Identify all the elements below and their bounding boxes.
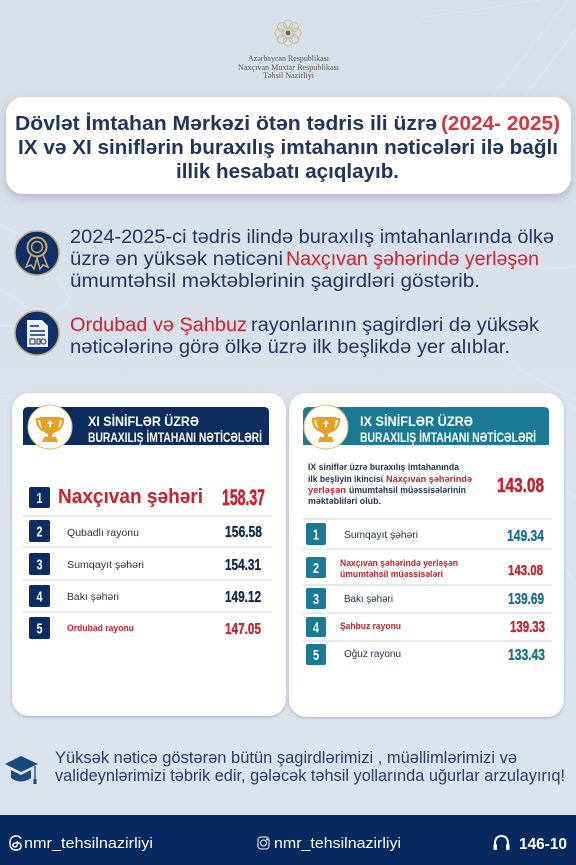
text block: congratulations xyxy=(55,749,565,785)
title banner xyxy=(6,97,571,194)
text block: Ordubad and Shahbuz xyxy=(70,315,540,358)
row 2: Naxçıvan schools xyxy=(306,557,543,580)
title banner: (2024- 2025) xyxy=(441,113,560,135)
threads handle: nmr_tehsilnazirliyi xyxy=(24,835,153,852)
text block: top result: üzrə ən yüksək nəticəni xyxy=(70,249,283,270)
icon: gold trophy xyxy=(28,405,72,449)
row 4: Bakı şəhəri: 4 xyxy=(36,588,43,606)
row 4: Bakı şəhəri: Bakı şəhəri xyxy=(67,592,119,603)
footer band xyxy=(0,815,576,865)
row 3: Bakı şəhəri: 3 xyxy=(313,591,319,608)
row 1: Naxçıvan şəhəri xyxy=(29,485,265,510)
text block: Ordubad and Shahbuz: rayonlarının şagirdləri də yüksək xyxy=(251,315,540,336)
row 5: Oğuz rayonu xyxy=(306,644,545,665)
row 2: Naxçıvan schools: Naxçıvan şəhərində yerləşən xyxy=(340,558,458,569)
highlighted score: 143.08 xyxy=(497,475,544,497)
logo: ministry emblem and name: Təhsil Nazirliyi xyxy=(263,71,315,80)
panel header: XI grade: BURAXILIŞ İMTAHANI NƏTİCƏLƏRİ xyxy=(88,430,262,445)
text block: top result xyxy=(70,227,554,292)
row 4: Şahbuz rayonu: 139.33 xyxy=(510,619,545,636)
panel header: IX grade: IX SİNİFLƏR ÜZRƏ xyxy=(360,413,473,429)
row 5: Ordubad rayonu xyxy=(29,617,261,639)
icon: headphones xyxy=(494,836,510,850)
row 1: Sumqayıt şəhəri xyxy=(306,523,544,545)
text block: second place note: IX siniflər üzrə buraxılış imtahanında xyxy=(308,462,460,473)
row 1: Naxçıvan şəhəri: 1 xyxy=(36,490,42,507)
row 3: Sumqayıt şəhəri: 154.31 xyxy=(225,557,261,574)
icon: graduation cap xyxy=(5,746,38,794)
row 5: Ordubad rayonu: Ordubad rayonu xyxy=(67,623,134,634)
row 3: Sumqayıt şəhəri: 3 xyxy=(36,556,42,574)
row 5: Oğuz rayonu: 133.43 xyxy=(508,647,545,664)
row 4: Bakı şəhəri: 149.12 xyxy=(225,589,261,606)
text block: second place note: məktəbliləri olub. xyxy=(308,496,381,507)
row 2: Qubadlı rayonu: 2 xyxy=(36,524,42,540)
row 3: Bakı şəhəri: 139.69 xyxy=(508,591,544,608)
row 5: Oğuz rayonu: Oğuz rayonu xyxy=(344,649,401,660)
row 2: Qubadlı rayonu: Qubadlı rayonu xyxy=(67,528,139,539)
text block: top result: 2024-2025-ci tədris ilində buraxılış imtahanlarında ölkə xyxy=(70,227,554,248)
text block: top result: ümumtəhsil məktəblərinin şagirdləri göstərib. xyxy=(70,271,480,292)
instagram handle: nmr_tehsilnazirliyi xyxy=(274,835,401,852)
row 4: Şahbuz rayonu xyxy=(306,617,545,637)
text block: Ordubad and Shahbuz: nəticələrinə görə ölkə üzrə ilk beşlikdə yer alıblar. xyxy=(70,337,510,358)
row 1: Sumqayıt şəhəri: 149.34 xyxy=(507,528,544,545)
row 3: Bakı şəhəri xyxy=(306,588,544,609)
title banner: Dövlət İmtahan Mərkəzi ötən tədris ili üzrə xyxy=(15,112,437,135)
row 2: Naxçıvan schools: ümumtəhsil müəssisələri xyxy=(340,569,443,580)
icon: award rosette badge xyxy=(15,231,59,275)
row 5: Ordubad rayonu: 147.05 xyxy=(225,621,261,638)
row 1: Naxçıvan şəhəri: Naxçıvan şəhəri xyxy=(58,486,203,508)
row 1: Sumqayıt şəhəri: Sumqayıt şəhəri xyxy=(344,530,418,541)
logo: ministry emblem and name xyxy=(238,20,340,80)
panel: XI grade results xyxy=(12,393,286,716)
text block: top result: Naxçıvan şəhərində yerləşən xyxy=(286,249,539,270)
title banner: IX və XI siniflərin buraxılış imtahanın nəticələri ilə bağlı xyxy=(18,137,558,159)
row 3: Sumqayıt şəhəri: Sumqayıt şəhəri xyxy=(67,560,144,571)
row 1: Naxçıvan şəhəri: 158.37 xyxy=(222,485,265,510)
icon: document report xyxy=(15,311,59,355)
panel header: XI grade xyxy=(23,407,269,445)
icon: rosette emblem xyxy=(275,20,301,46)
row 1: Sumqayıt şəhəri: 1 xyxy=(313,526,319,544)
row 2: Qubadlı rayonu: 156.58 xyxy=(225,524,262,541)
panel: IX grade results xyxy=(289,393,564,717)
title banner: illik hesabatı açıqlayıb. xyxy=(176,161,399,183)
row 2: Qubadlı rayonu xyxy=(29,520,262,542)
text block: second place note: Naxçıvan şəhərində xyxy=(386,474,472,485)
row 3: Sumqayıt şəhəri xyxy=(29,553,261,575)
row 2: Naxçıvan schools: 2 xyxy=(313,560,319,577)
row 5: Ordubad rayonu: 5 xyxy=(36,620,42,638)
text block: second place note xyxy=(308,462,472,507)
logo: ministry emblem and name: Azərbaycan Respublikası xyxy=(248,54,330,63)
logo: ministry emblem and name: Naxçıvan Muxtar Respublikası xyxy=(238,63,340,72)
row 2: Naxçıvan schools: 143.08 xyxy=(508,562,543,579)
text block: second place note: ümumtəhsil müəssisələrinin xyxy=(349,485,466,496)
text block: Ordubad and Shahbuz: Ordubad və Şahbuz xyxy=(70,315,247,336)
text block: congratulations: Yüksək nəticə göstərən bütün şagirdlərimizi , müəllimlərimizi və xyxy=(55,749,517,767)
hotline number: 146-10 xyxy=(519,836,567,853)
row 3: Bakı şəhəri: Bakı şəhəri xyxy=(344,594,393,605)
icon: threads xyxy=(10,836,21,850)
row 4: Şahbuz rayonu: 4 xyxy=(313,620,319,636)
row 4: Bakı şəhəri xyxy=(29,585,261,607)
row 5: Oğuz rayonu: 5 xyxy=(313,647,319,664)
text block: second place note: ilk beşliyin ikincisi xyxy=(308,474,383,485)
row 4: Şahbuz rayonu: Şahbuz rayonu xyxy=(340,621,401,632)
text block: congratulations: valideynlərimizi təbrik edir, gələcək təhsil yollarında uğurlar arzulayırıq! xyxy=(55,767,565,785)
text block: second place note: yerləşən xyxy=(308,485,346,496)
panel header: IX grade xyxy=(303,407,549,445)
panel header: XI grade: XI SİNİFLƏR ÜZRƏ xyxy=(88,413,199,429)
icon: instagram xyxy=(258,837,269,849)
icon: gold trophy xyxy=(304,405,348,449)
